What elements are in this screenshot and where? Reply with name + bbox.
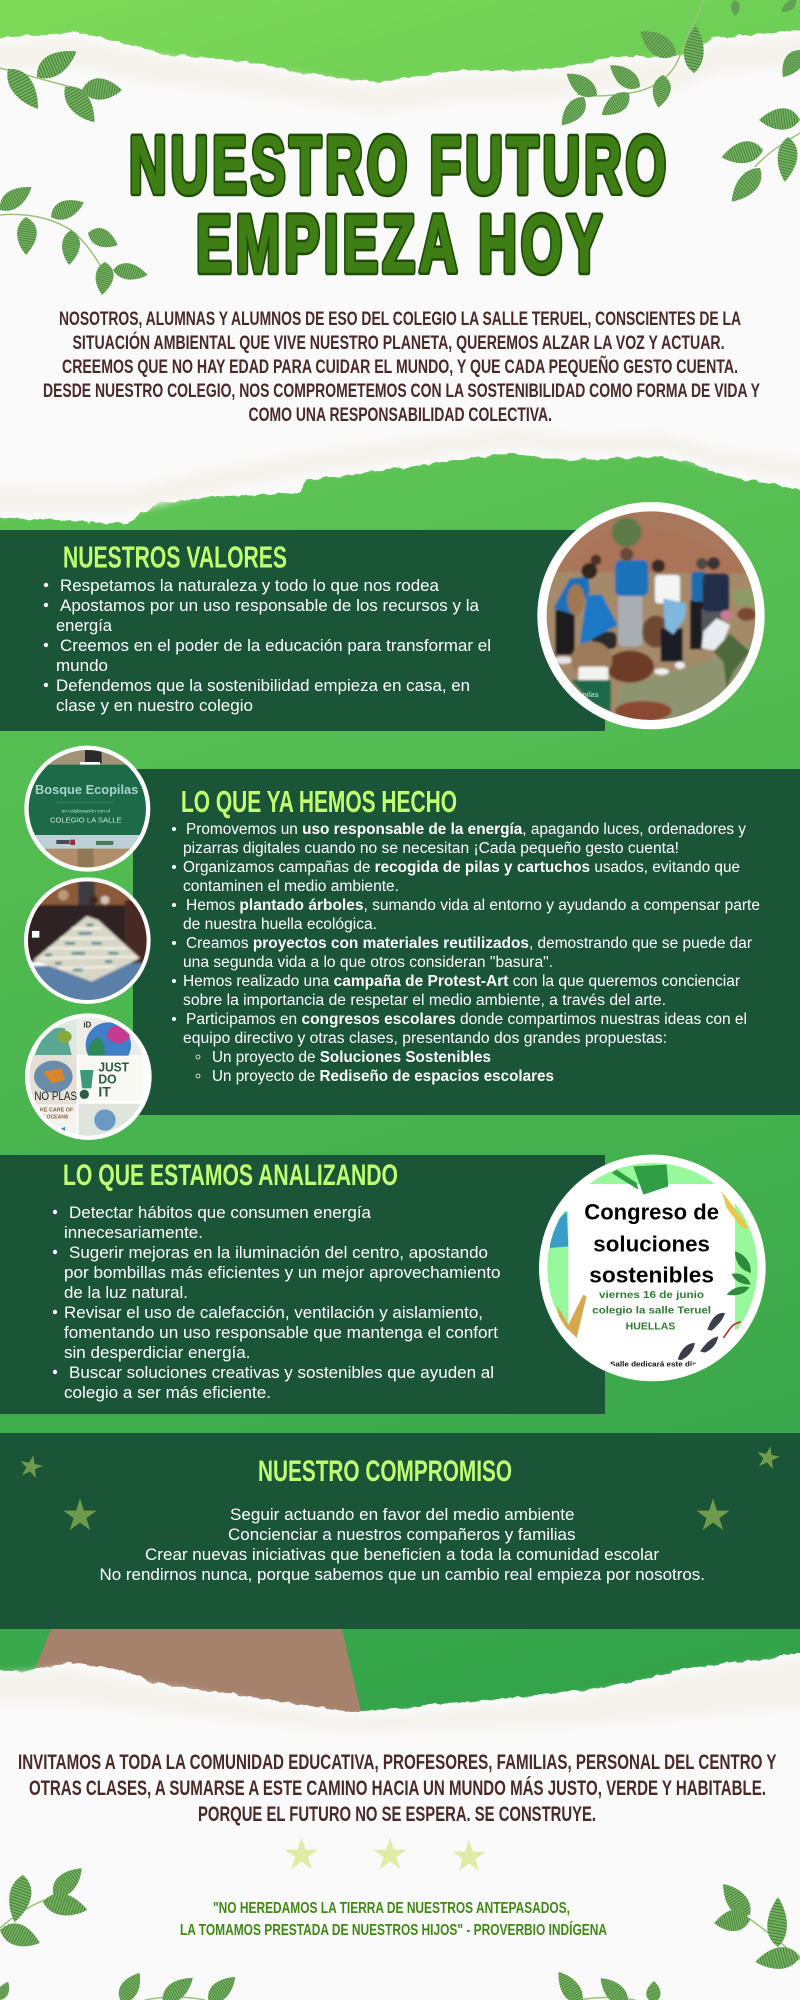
brown path shape (23, 1629, 363, 1720)
list: acciones: sobre la importancia de respetar el medio ambiente, a través del arte. (183, 992, 666, 1009)
heading: nuestro compromiso: NUESTRO COMPROMISO (258, 1455, 512, 1488)
panel: nuestro compromiso (0, 1433, 800, 1629)
list: análisis: Revisar el uso de calefacción, ventilación y aislamiento, (64, 1303, 483, 1322)
list: acciones: Hemos plantado árboles, sumando vida al entorno y ayudando a compensar parte (186, 897, 760, 914)
list: valores: Defendemos que la sostenibilidad empieza en casa, en (56, 676, 470, 695)
list: análisis: fomentando un uso responsable que mantenga el confort (64, 1323, 498, 1342)
leaves: bottom right branch (713, 1878, 800, 1971)
photo: protest-art collage: IT (98, 1084, 111, 1100)
photo: protest-art collage: KE CARE OF (40, 1108, 74, 1114)
list: acciones: de nuestra huella ecológica. (183, 916, 377, 933)
heading: lo que estamos analizando: LO QUE ESTAMOS ANALIZANDO (63, 1159, 398, 1192)
list: acciones: Creamos proyectos con materiales reutilizados, demostrando que se puede dar (186, 935, 752, 952)
list: análisis: de la luz natural. (64, 1283, 188, 1302)
text: compromisos: Crear nuevas iniciativas que beneficien a toda la comunidad escolar (145, 1545, 659, 1564)
list: análisis: innecesariamente. (64, 1223, 203, 1242)
list: acciones: Participamos en congresos escolares donde compartimos nuestras ideas con el (186, 1011, 747, 1028)
list: análisis: Detectar hábitos que consumen energía (69, 1203, 372, 1222)
list: análisis: colegio a ser más eficiente. (64, 1383, 271, 1402)
panel: lo que estamos analizando (0, 1155, 605, 1414)
list: valores: clase y en nuestro colegio (56, 696, 253, 715)
text: compromisos: Seguir actuando en favor del medio ambiente (230, 1505, 574, 1524)
heading: nuestros valores: NUESTROS VALORES (63, 540, 287, 574)
photo: students planting trees: pilas (583, 692, 599, 699)
photo: bosque ecopilas sign: COLEGIO LA SALLE (50, 815, 122, 824)
closing text: PORQUE EL FUTURO NO SE ESPERA. SE CONSTRUYE. (198, 1803, 596, 1826)
photo: pyramid of recycled boxes (24, 877, 152, 1007)
leaves: bottom left branch (0, 1861, 89, 1952)
poster: congreso de soluciones sostenibles: colegio la salle Teruel (592, 1306, 711, 1317)
list: acciones: pizarras digitales cuando no se necesitan ¡Cada pequeño gesto cuenta! (183, 840, 679, 857)
list: análisis: Buscar soluciones creativas y sostenibles que ayuden al (69, 1363, 494, 1382)
list: análisis: por bombillas más eficientes y un mejor aprovechamiento (64, 1263, 501, 1282)
list: valores: Respetamos la naturaleza y todo lo que nos rodea (60, 576, 440, 595)
quote (180, 1900, 607, 1939)
leaves: top left branch (0, 42, 122, 128)
text: compromisos (100, 1505, 705, 1584)
list: acciones: Hemos realizado una campaña de Protest-Art con la que queremos concienciar (183, 973, 740, 990)
leaves: bottom centre left (0, 1968, 241, 2000)
list: acciones: Promovemos un uso responsable de la energía, apagando luces, ordenadores y (186, 821, 746, 838)
photo: protest-art collage: DO (98, 1072, 117, 1086)
torn paper: top white area (0, 30, 800, 524)
heading: lo que ya hemos hecho: LO QUE YA HEMOS HECHO (181, 784, 457, 819)
closing text (18, 1751, 776, 1826)
list: valores: Apostamos por un uso responsable de los recursos y la (60, 596, 480, 615)
list: acciones: Un proyecto de Rediseño de espacios escolares (212, 1068, 554, 1085)
torn paper: bottom white area (0, 1650, 800, 2000)
photo: bosque ecopilas sign: en colaboración con el (62, 809, 110, 814)
list: valores: Creemos en el poder de la educación para transformar el (60, 636, 491, 655)
list: acciones: una segunda vida a lo que otros consideran "basura". (183, 954, 553, 971)
leaves: left middle branch (0, 179, 149, 296)
list: acciones: equipo directivo y otras clases, presentando dos grandes propuestas: (183, 1030, 667, 1047)
leaves: bottom centre right (551, 1967, 660, 2000)
panel: nuestros valores (0, 530, 605, 731)
intro text (43, 309, 760, 426)
poster: congreso de soluciones sostenibles: Congreso de (584, 1200, 719, 1225)
list: valores: energía (56, 616, 113, 635)
text: compromisos: No rendirnos nunca, porque sabemos que un cambio real empieza por nosotros. (100, 1565, 705, 1584)
poster: congreso de soluciones sostenibles: HUELLAS (626, 1322, 676, 1333)
leaves: right branch (720, 108, 800, 209)
photo: students planting trees (537, 502, 765, 729)
photo: protest-art collage: NO PLAS (34, 1089, 77, 1103)
photo: bosque ecopilas sign: Bosque Ecopilas (35, 783, 138, 797)
poster: congreso de soluciones sostenibles: soluciones (593, 1231, 710, 1256)
quote: "NO HEREDAMOS LA TIERRA DE NUESTROS ANTEPASADOS, (213, 1900, 570, 1917)
poster: congreso de soluciones sostenibles: viernes 16 de junio (599, 1290, 704, 1301)
list: valores (44, 576, 491, 715)
list: acciones: Un proyecto de Soluciones Sostenibles (212, 1049, 491, 1066)
list: acciones: contaminen el medio ambiente. (183, 878, 399, 895)
intro text: COMO UNA RESPONSABILIDAD COLECTIVA. (248, 405, 552, 426)
list: valores: mundo (56, 656, 108, 675)
poster: congreso de soluciones sostenibles: sostenibles (589, 1262, 714, 1287)
quote: LA TOMAMOS PRESTADA DE NUESTROS HIJOS" - PROVERBIO INDÍGENA (180, 1920, 607, 1939)
list: análisis (53, 1203, 501, 1402)
panel: lo que ya hemos hecho (133, 769, 800, 1115)
photo: protest-art collage (25, 1013, 152, 1140)
photo: protest-art collage: E OCEANS (42, 1114, 69, 1120)
poster: congreso de soluciones sostenibles: Salle dedicará este día (610, 1361, 697, 1368)
poster: congreso de soluciones sostenibles (539, 1155, 766, 1381)
title (129, 120, 670, 290)
list: acciones (172, 821, 760, 1085)
photo: protest-art collage: iD (83, 1021, 92, 1030)
stars: decoration (18, 1444, 782, 1530)
photo: protest-art collage: JUST (98, 1061, 129, 1075)
list: análisis: Sugerir mejoras en la iluminación del centro, apostando (69, 1243, 488, 1262)
list: acciones: Organizamos campañas de recogida de pilas y cartuchos usados, evitando que (183, 859, 740, 876)
stars: three light stars (285, 1838, 486, 1871)
photo: bosque ecopilas sign (24, 746, 152, 872)
text: compromisos: Concienciar a nuestros compañeros y familias (228, 1525, 576, 1544)
list: análisis: sin desperdiciar energía. (64, 1343, 250, 1362)
leaves: top right branch (555, 0, 800, 131)
